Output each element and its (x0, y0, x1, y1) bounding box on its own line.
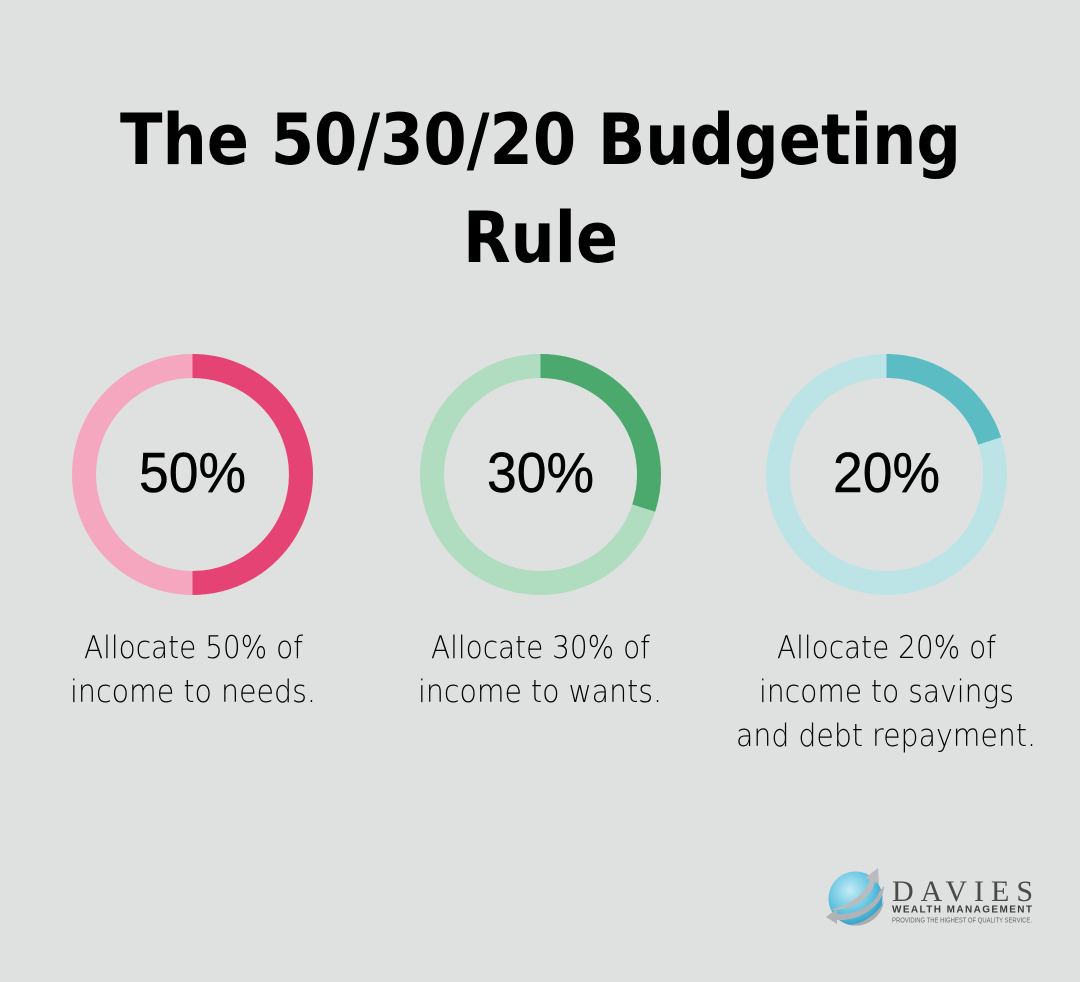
panel: 30% wants (418, 366, 662, 710)
wordmark: DAVIES: DAVIES (892, 875, 1033, 908)
title: The 50/30/20 Budgeting (120, 99, 961, 181)
logo: Davies Wealth Management (826, 868, 1033, 926)
description: needs: Allocate 50% of (84, 630, 303, 666)
description: needs (70, 630, 316, 710)
description: savings: income to savings (759, 674, 1014, 710)
description: wants: income to wants. (418, 674, 662, 710)
description: savings: and debt repayment. (736, 718, 1036, 754)
description: wants (418, 630, 662, 710)
title (120, 99, 961, 279)
description: needs: income to needs. (70, 674, 316, 710)
description: savings (736, 630, 1036, 754)
panel: 20% savings (736, 366, 1036, 754)
tagline: PROVIDING THE HIGHEST OF QUALITY SERVICE. (892, 916, 1032, 924)
description: wants: Allocate 30% of (431, 630, 650, 666)
value: 50%: 50% (139, 441, 246, 505)
wordmark: WEALTH MANAGEMENT: WEALTH MANAGEMENT (892, 904, 1032, 916)
icon: globe with arrows (826, 868, 884, 926)
donut chart: 20% (778, 366, 995, 583)
title: Rule (463, 197, 618, 279)
value: 30%: 30% (487, 441, 594, 505)
value: 20%: 20% (833, 441, 940, 505)
donut chart: 30% (432, 366, 649, 583)
panel: 50% needs (70, 366, 316, 710)
donut chart: 50% (84, 366, 301, 583)
description: savings: Allocate 20% of (777, 630, 996, 666)
